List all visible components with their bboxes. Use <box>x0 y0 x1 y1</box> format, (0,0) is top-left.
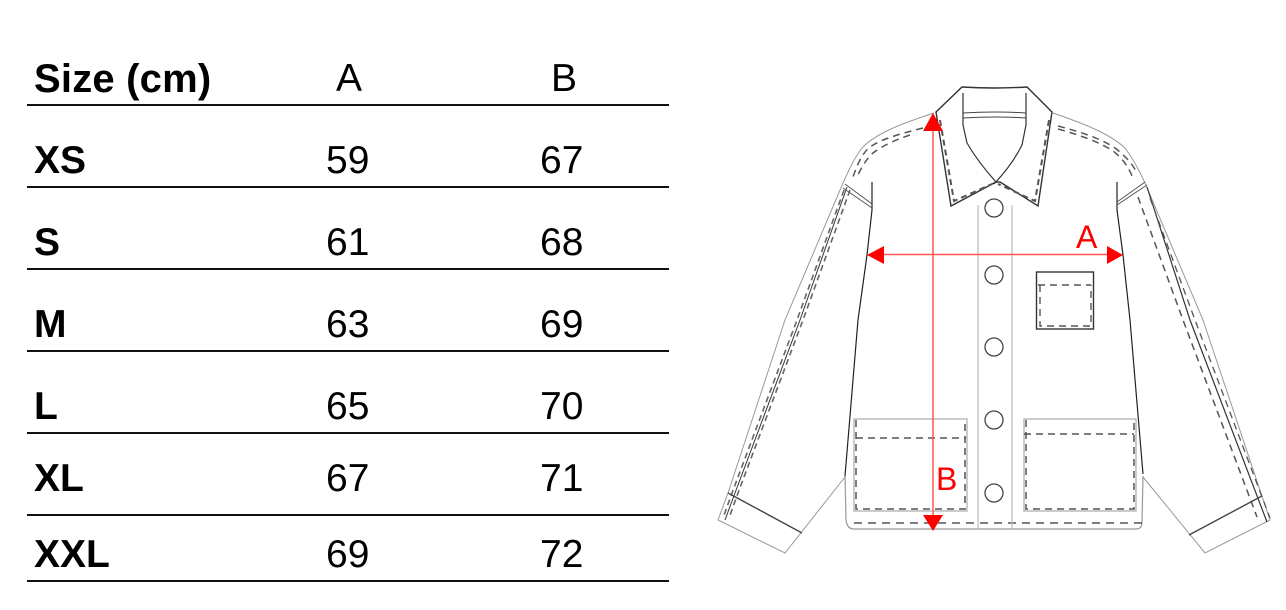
row S: S <box>34 221 60 264</box>
left sleeve <box>718 113 934 553</box>
row L: 70 <box>540 385 583 428</box>
collar <box>936 87 1052 206</box>
table header <box>27 57 669 106</box>
row L <box>27 385 669 434</box>
row XXL: 72 <box>540 533 583 576</box>
row XL: 71 <box>540 457 583 500</box>
row M: M <box>34 303 66 346</box>
row S: 68 <box>540 221 583 264</box>
row XL: XL <box>34 457 84 500</box>
size table <box>27 57 669 582</box>
label B: B <box>936 461 957 497</box>
row S <box>27 221 669 270</box>
left lower pocket <box>854 419 967 511</box>
right lower pocket <box>1024 419 1136 511</box>
right sleeve <box>1053 113 1270 553</box>
chest pocket <box>1036 272 1094 329</box>
row M: 69 <box>540 303 583 346</box>
row XL: 67 <box>326 457 369 500</box>
buttons <box>985 199 1003 502</box>
table header: A <box>336 57 362 100</box>
row XS: XS <box>34 139 86 182</box>
arrow: width A <box>867 246 1123 264</box>
row XS: 67 <box>540 139 583 182</box>
row M <box>27 303 669 352</box>
row M: 63 <box>326 303 369 346</box>
row XXL: 69 <box>326 533 369 576</box>
row S: 61 <box>326 221 369 264</box>
row L: 65 <box>326 385 369 428</box>
row XXL <box>27 533 669 582</box>
table header: Size (cm) <box>34 57 211 101</box>
jacket body <box>845 182 1143 529</box>
row XL <box>27 457 669 516</box>
arrow: height B <box>923 113 943 531</box>
label A: A <box>1076 219 1098 255</box>
row L: L <box>34 385 58 428</box>
row XS: 59 <box>326 139 369 182</box>
row XXL: XXL <box>34 533 110 576</box>
table header: B <box>551 57 577 100</box>
row XS <box>27 139 669 188</box>
